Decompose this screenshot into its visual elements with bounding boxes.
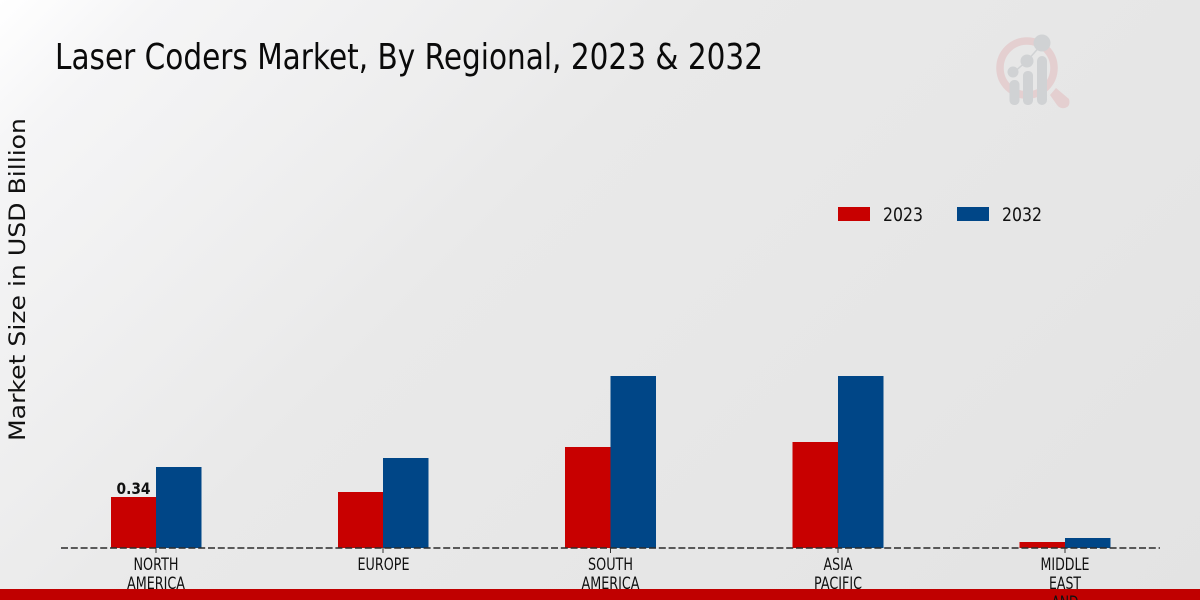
legend — [838, 204, 1042, 226]
icon: watermark logo — [1000, 34, 1070, 108]
label: Asia Pacific: ASIA — [824, 555, 853, 574]
group: North America — [111, 467, 202, 548]
label: Europe: EUROPE — [358, 555, 410, 574]
legend: 2023 — [838, 204, 923, 226]
category labels — [127, 555, 1090, 600]
group: South America — [565, 376, 656, 548]
label: South America: AMERICA — [582, 574, 640, 593]
footer bar — [0, 589, 1200, 600]
label: North America: NORTH — [134, 555, 178, 574]
label: Middle East and: MIDDLE — [1040, 555, 1090, 574]
legend: 2032: 2032 — [1002, 204, 1042, 226]
group: Europe — [338, 458, 428, 548]
bar chart — [111, 376, 1110, 548]
label: Middle East and: EAST — [1049, 574, 1082, 593]
title: Laser Coders Market, By Regional, 2023 & 2032 — [55, 37, 763, 78]
value label: 0.34 — [116, 479, 150, 498]
legend: 2032 — [957, 204, 1042, 226]
group: Asia Pacific — [792, 376, 884, 548]
x axis baseline — [61, 547, 1160, 549]
y axis title: Market Size in USD Billion — [5, 118, 31, 441]
group: Middle East and Africa — [1020, 538, 1110, 548]
legend: 2023: 2023 — [883, 204, 923, 226]
x axis ticks — [156, 548, 1065, 553]
label: South America: SOUTH — [588, 555, 633, 574]
label: North America: AMERICA — [127, 574, 186, 593]
label: Asia Pacific: PACIFIC — [814, 574, 862, 593]
